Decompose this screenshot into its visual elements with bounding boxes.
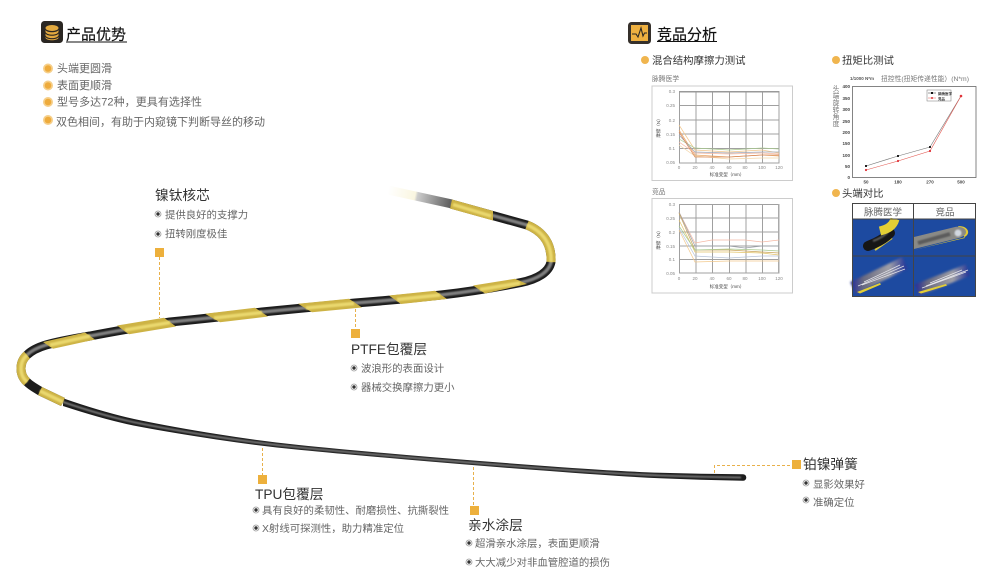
callout: TPU包覆层: 具有良好的柔韧性、耐磨损性、抗撕裂性 (262, 504, 449, 517)
callout: 铂镍弹簧: 铂镍弹簧 (803, 457, 858, 472)
line chart: 脉腾医学: 0.2 (669, 118, 675, 123)
line chart: 脉腾医学: 100 (758, 165, 766, 170)
line chart: 竞品: 40 (709, 276, 715, 281)
callout: 镍钛核芯: 镍钛核芯 (155, 188, 210, 203)
table: 头端对比 images: 脉腾医学 (864, 206, 902, 218)
line chart: 竞品: 0.25 (666, 216, 675, 221)
line chart: 扭矩比: 50 (863, 180, 869, 184)
list: 产品优势 points: 头端更圆滑 (57, 62, 112, 75)
callout: 镍钛核芯: 扭转刚度极佳 (165, 228, 227, 240)
line chart: 扭矩比: 头 (833, 84, 840, 93)
list: 产品优势 points: 型号多达72种，更具有选择性 (57, 94, 202, 108)
callout: TPU包覆层: TPU包覆层 (255, 487, 323, 502)
heading: 产品优势: 产品优势 (66, 26, 126, 44)
line chart: 脉腾医学: 0.05 (666, 160, 675, 165)
line chart: 竞品: 120 (775, 276, 783, 281)
line chart: 脉腾医学: 20 (692, 165, 698, 170)
line chart: 扭矩比: 度 (833, 119, 840, 128)
line chart: 脉腾医学: 摩擦（N） (655, 116, 662, 138)
line chart: 扭矩比: 1/1000 N*m (850, 76, 874, 81)
callout: 铂镍弹簧: 显影效果好 (813, 478, 865, 491)
callout: 亲水涂层: 大大减少对非血管腔道的损伤 (475, 556, 610, 569)
callout: PTFE包覆层: 波浪形的表面设计 (361, 362, 444, 375)
callout: 镍钛核芯 (155, 188, 248, 318)
subheading: 头端对比 (832, 187, 884, 200)
line chart: 脉腾医学: 0 (678, 165, 681, 170)
line chart: 脉腾医学: 60 (726, 165, 732, 170)
callout: 亲水涂层: 亲水涂层 (468, 518, 523, 533)
line chart: 竞品: 0.05 (666, 271, 675, 276)
callout: 亲水涂层 (466, 467, 610, 569)
line chart: 扭矩比: 端 (833, 91, 840, 100)
line chart: 脉腾医学: 80 (742, 165, 748, 170)
line chart: 脉腾医学: 标准变型（mm） (710, 171, 744, 178)
list: 产品优势 points: 双色相间，有助于内窥镜下判断导丝的移动 (56, 114, 265, 128)
line chart: 竞品: 0.1 (669, 257, 675, 262)
callout: 镍钛核芯: 提供良好的支撑力 (165, 208, 248, 222)
heading: 竞品分析: 竞品分析 (657, 26, 717, 44)
line chart: 扭矩比: 扭控性(扭矩传递性能）(N*m) (881, 74, 969, 83)
black tube base (21, 204, 551, 402)
callout: PTFE包覆层 (351, 309, 455, 394)
list: 产品优势 points: 表面更顺滑 (57, 78, 112, 92)
image: 竞品 tip (914, 226, 968, 250)
line chart: 脉腾医学 (652, 74, 792, 180)
line chart: 扭矩比: 0 (847, 175, 850, 180)
callout: 铂镍弹簧: 准确定位 (813, 496, 855, 509)
yellow tube segments (21, 200, 551, 402)
line chart: 扭矩比: 270 (926, 180, 934, 184)
callout: PTFE包覆层: PTFE包覆层 (351, 342, 427, 357)
line chart: 脉腾医学: 脉腾医学 (652, 74, 679, 83)
line chart: 扭矩比: 角 (833, 112, 839, 121)
line chart: 脉腾医学: 0.1 (669, 146, 675, 151)
line chart: 扭矩比: 350 (842, 96, 850, 101)
callout: PTFE包覆层: 器械交换摩擦力更小 (361, 381, 455, 394)
line chart: 扭矩比: 250 (842, 119, 850, 124)
guidewire (21, 190, 746, 481)
icon: coin stack (41, 21, 63, 43)
line chart: 竞品: 100 (758, 276, 766, 281)
line chart: 扭矩比: 300 (842, 107, 850, 112)
table: 头端对比 images: 竞品 (935, 206, 955, 218)
callout: 铂镍弹簧 (714, 457, 865, 509)
line chart: 竞品: 0.3 (669, 202, 675, 207)
line chart: 竞品: 标准变型（mm） (710, 283, 744, 290)
table: 头端对比 images (852, 204, 976, 297)
subheading: 混合结构摩擦力测试: 混合结构摩擦力测试 (652, 54, 746, 67)
line chart: 竞品: 竞品 (652, 187, 666, 196)
distal black shaft (63, 398, 746, 481)
image: 脉腾医学 tip under X-ray (853, 263, 905, 294)
line chart: 扭矩比: 400 (842, 84, 850, 89)
line chart: 脉腾医学: 40 (709, 165, 715, 170)
image: 竞品 tip under X-ray (917, 270, 968, 294)
line chart: 扭矩比: 转 (833, 105, 840, 114)
line chart: 扭矩比: 150 (842, 141, 850, 146)
image: 脉腾医学 tip (868, 219, 895, 250)
subheading: 扭矩比测试: 扭矩比测试 (842, 54, 895, 67)
line chart: 扭矩比: 脉腾医学 (938, 91, 952, 96)
line chart: 竞品: 摩擦（N） (655, 228, 662, 250)
line chart: 脉腾医学: 120 (775, 165, 783, 170)
line chart: 脉腾医学: 0.15 (666, 132, 675, 137)
line chart: 竞品: 20 (692, 276, 698, 281)
callout: TPU包覆层: X射线可探测性，助力精准定位 (262, 522, 404, 535)
line chart: 扭矩比: 旋 (833, 98, 840, 107)
line chart: 扭矩比 (833, 74, 976, 184)
callout: TPU包覆层 (253, 448, 449, 535)
line chart: 竞品: 60 (726, 276, 732, 281)
line chart: 扭矩比: 竞品 (938, 96, 946, 101)
callout: 亲水涂层: 超滑亲水涂层，表面更顺滑 (475, 537, 600, 550)
subheading: 头端对比: 头端对比 (842, 187, 884, 200)
line chart: 竞品: 0 (678, 276, 681, 281)
icon: pulse monitor (628, 22, 651, 44)
list: 产品优势 points (43, 62, 265, 128)
line chart: 脉腾医学: 0.3 (669, 89, 675, 94)
line chart: 脉腾医学: 0.25 (666, 103, 675, 108)
line chart: 竞品: 0.2 (669, 230, 675, 235)
line chart: 扭矩比: 180 (894, 180, 902, 184)
line chart: 扭矩比: 100 (842, 153, 850, 158)
line chart: 扭矩比: 500 (957, 180, 965, 184)
line chart: 竞品: 0.15 (666, 244, 675, 249)
line chart: 扭矩比: 200 (842, 130, 850, 135)
line chart: 竞品: 80 (742, 276, 748, 281)
line chart: 竞品 (652, 187, 792, 293)
line chart: 扭矩比: 50 (845, 164, 850, 169)
